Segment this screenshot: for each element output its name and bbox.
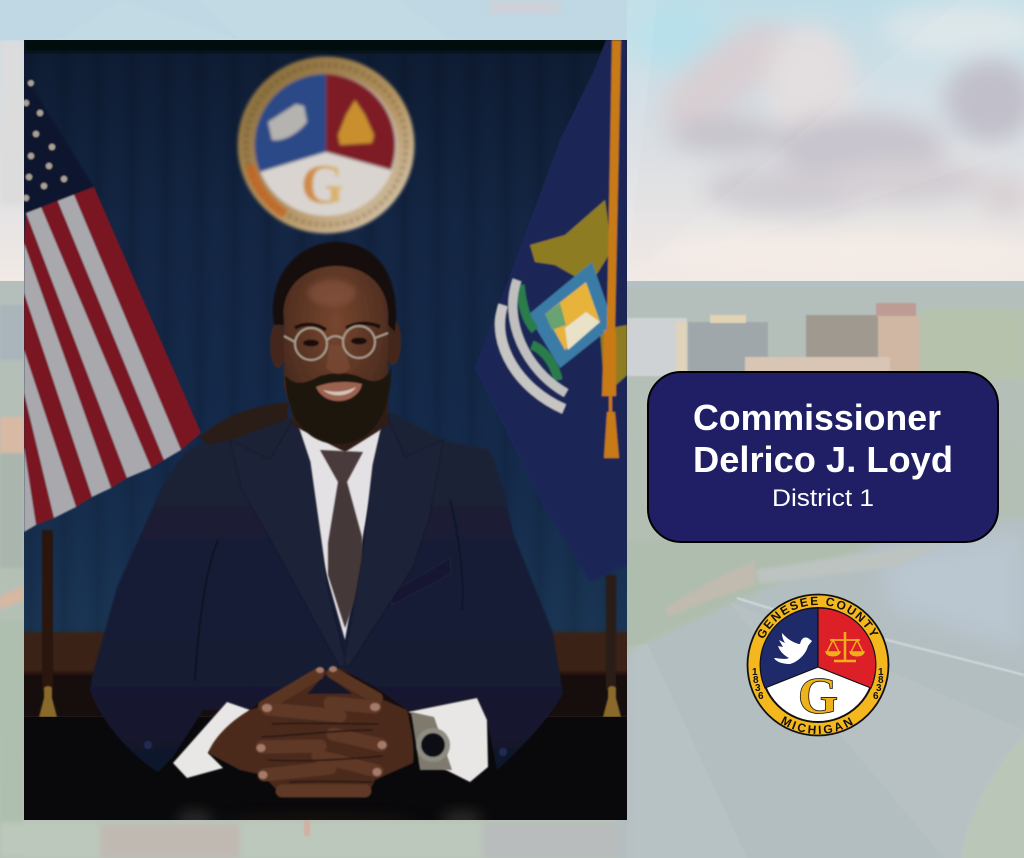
rim text bottom: MICHIGAN bbox=[780, 716, 853, 734]
nose bbox=[326, 345, 350, 374]
name plate bbox=[648, 372, 998, 542]
dam line bbox=[737, 598, 1024, 675]
rim text top: GENESEE COUNTY bbox=[758, 596, 879, 638]
chair back bbox=[200, 402, 289, 445]
Genesee County seal logo bbox=[746, 594, 890, 736]
founding year left: 1836 bbox=[752, 667, 764, 702]
name line two: Delrico J. Loyd bbox=[693, 439, 953, 480]
wristwatch bbox=[411, 712, 452, 770]
tree bank bbox=[962, 738, 1024, 858]
hands bbox=[208, 666, 414, 797]
ears bbox=[270, 322, 286, 368]
riverbank greenery bbox=[627, 646, 634, 654]
neck and head bbox=[270, 242, 401, 452]
shirt cuffs bbox=[173, 698, 488, 782]
flag canton with stars bbox=[23, 78, 94, 214]
gold cord and tassels bbox=[602, 40, 621, 458]
beard bbox=[285, 368, 391, 444]
Michigan flag bbox=[475, 40, 627, 582]
face bbox=[284, 266, 388, 443]
glasses bbox=[284, 326, 388, 360]
name line one: Commissioner bbox=[693, 397, 941, 438]
flag eagle bbox=[530, 200, 612, 285]
wall seal: G bbox=[301, 154, 345, 216]
wall seal bbox=[238, 56, 414, 234]
man bbox=[90, 242, 563, 797]
fingertips bbox=[256, 666, 386, 779]
district label: District 1 bbox=[772, 485, 874, 512]
desk bbox=[24, 717, 627, 820]
American flag bbox=[23, 78, 201, 532]
eyes and brows bbox=[295, 323, 380, 346]
icon: scales of justice bbox=[826, 632, 864, 661]
flag green leaves bbox=[520, 285, 535, 330]
founding year right: 1836 bbox=[873, 667, 884, 702]
portrait photo bbox=[20, 38, 632, 830]
hair bbox=[273, 242, 396, 332]
mouth bbox=[316, 382, 362, 401]
flag pole bbox=[42, 530, 53, 690]
brass pole bases bbox=[39, 686, 621, 717]
old stone wall bbox=[665, 560, 755, 618]
sleeve buttons bbox=[144, 741, 152, 749]
right flag pole bbox=[606, 575, 616, 690]
icon: dove bbox=[774, 633, 812, 664]
light rays overlay bbox=[647, 374, 999, 731]
red segment bbox=[818, 608, 876, 688]
tie bbox=[320, 450, 364, 628]
river bbox=[620, 515, 1024, 858]
flag ribbon bbox=[513, 280, 566, 393]
curtain backdrop bbox=[20, 38, 632, 719]
sky with clouds bbox=[0, 0, 1024, 281]
forehead highlight bbox=[308, 280, 356, 306]
letter G: G bbox=[798, 668, 838, 725]
jacket pocket bbox=[391, 558, 451, 605]
gap between fingers bbox=[307, 674, 353, 694]
flag shield bbox=[528, 262, 614, 368]
suit jacket bbox=[90, 410, 563, 772]
ground and city bbox=[0, 281, 1024, 858]
lapels bbox=[230, 423, 444, 606]
blue segment bbox=[760, 608, 818, 688]
bridge bbox=[756, 547, 930, 584]
dress shirt bbox=[298, 428, 382, 640]
back shirt sliver bbox=[457, 615, 477, 678]
desk reflections bbox=[176, 806, 483, 820]
